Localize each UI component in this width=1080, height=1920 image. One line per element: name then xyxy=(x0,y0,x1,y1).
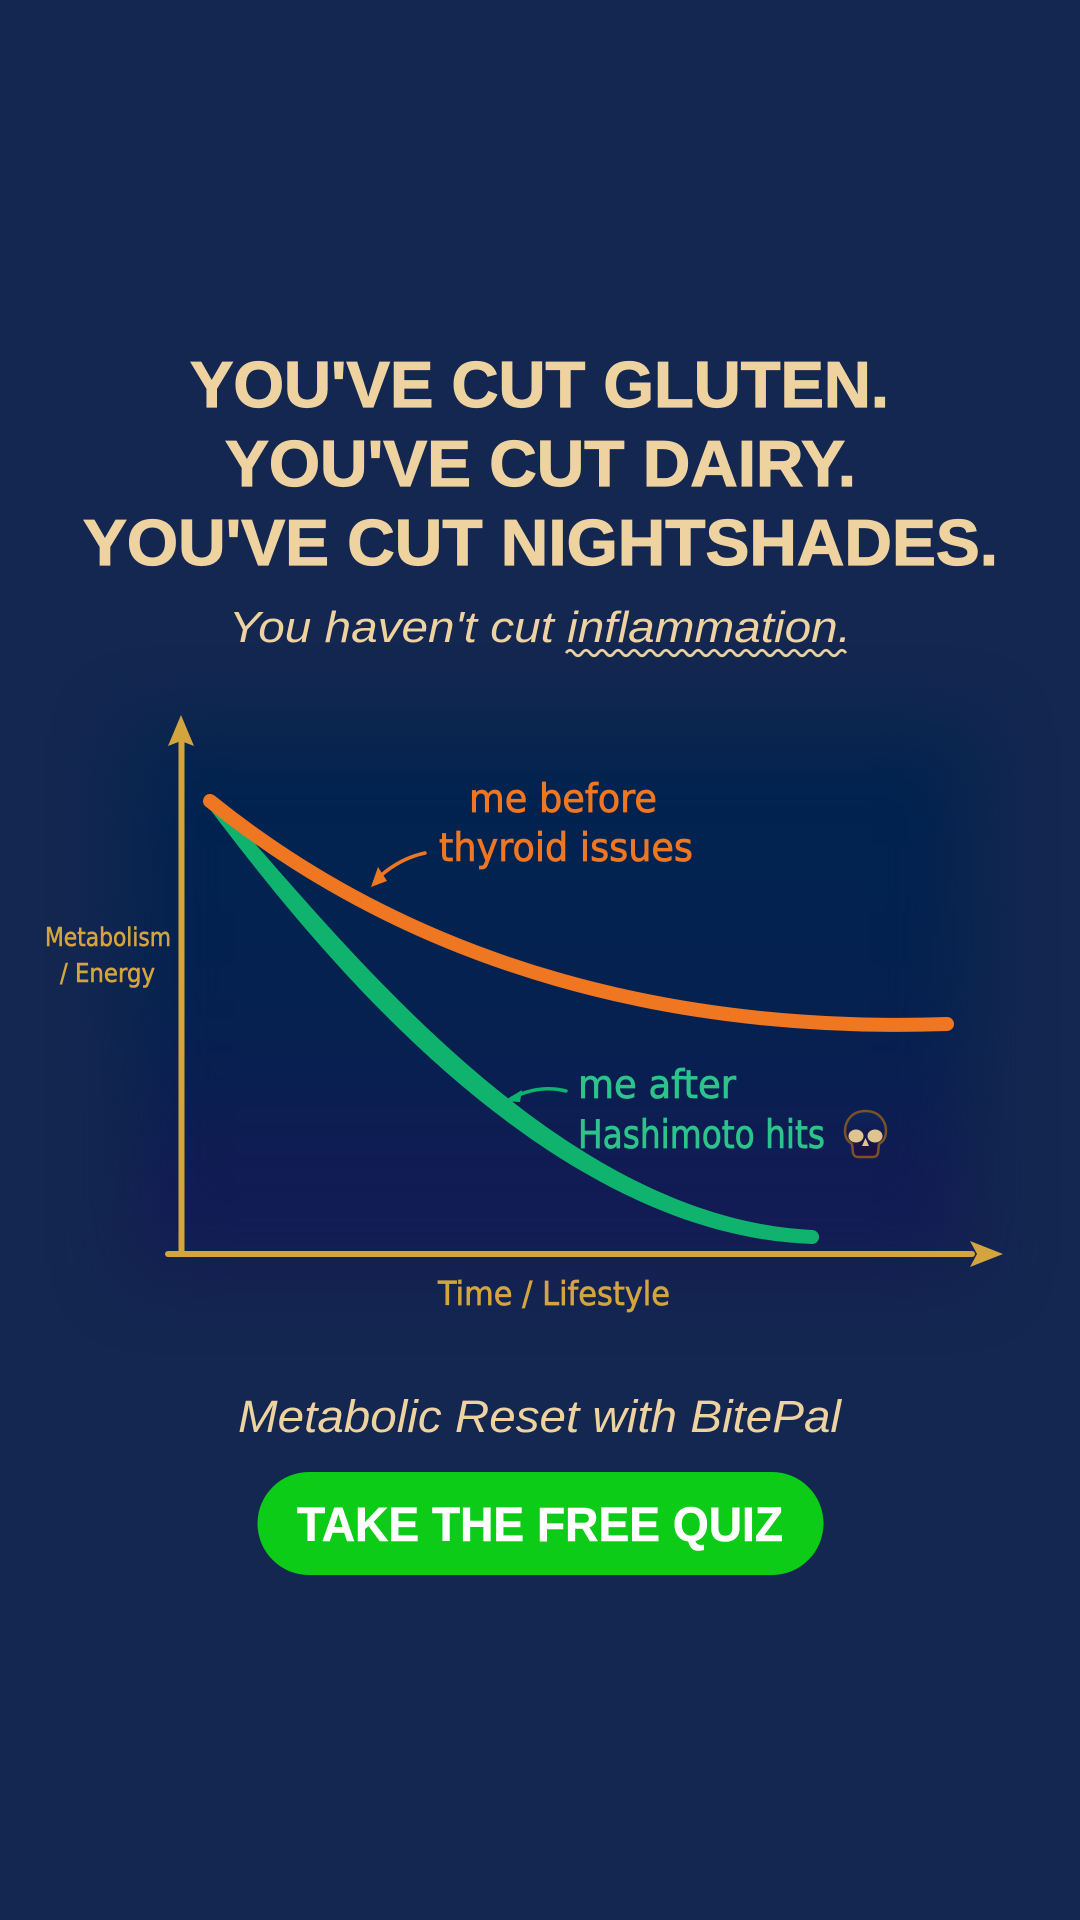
orange curve: me before xyxy=(210,801,947,1025)
headline: YOU'VE CUT DAIRY. xyxy=(225,427,856,500)
squiggle underline xyxy=(566,650,846,656)
chart xyxy=(45,715,1003,1313)
subtitle: You haven't cut inflammation. xyxy=(229,603,851,652)
arrow: green callout xyxy=(504,1089,566,1102)
chart glow background xyxy=(135,735,970,1265)
cta button xyxy=(258,1472,824,1575)
headline: YOU'VE CUT GLUTEN. xyxy=(190,348,889,421)
headline xyxy=(83,348,998,579)
icon: skull xyxy=(845,1111,886,1157)
x axis xyxy=(165,1241,1003,1267)
x axis label: Time / Lifestyle xyxy=(437,1274,670,1313)
arrow: orange callout xyxy=(371,853,425,887)
y axis label: / Energy xyxy=(60,959,155,989)
label: me before thyroid issues xyxy=(439,777,693,871)
y axis label xyxy=(45,923,171,989)
label: me after Hashimoto hits: Hashimoto hits xyxy=(578,1113,825,1158)
y axis label: Metabolism xyxy=(45,923,171,953)
tagline: Metabolic Reset with BitePal xyxy=(238,1391,843,1442)
label: me before thyroid issues: me before xyxy=(469,777,657,822)
label: me after Hashimoto hits xyxy=(578,1063,825,1158)
green curve: me after xyxy=(205,796,819,1244)
headline: YOU'VE CUT NIGHTSHADES. xyxy=(83,506,998,579)
cta button: TAKE THE FREE QUIZ xyxy=(297,1499,783,1552)
label: me before thyroid issues: thyroid issues xyxy=(439,826,693,871)
y axis xyxy=(168,715,194,1256)
label: me after Hashimoto hits: me after xyxy=(578,1063,737,1108)
